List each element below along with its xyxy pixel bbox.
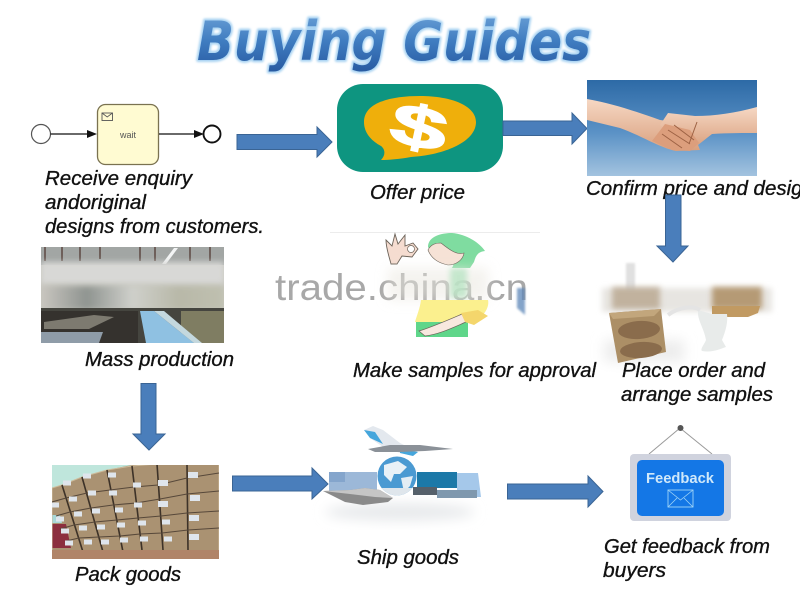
text: receive enquiry step: andoriginal (45, 192, 147, 214)
text: receive enquiry step (45, 168, 264, 238)
icon: hanging feedback sign: Feedback (646, 471, 715, 487)
label: get feedback from buyers (603, 536, 770, 582)
label: place order and arrange samples: arrange samples (621, 384, 773, 406)
icon: price speech bubble (337, 84, 503, 172)
arrow: confirm down to place order (657, 195, 688, 262)
text: receive enquiry step: Receive enquiry (45, 168, 193, 190)
label: pack goods: Pack goods (75, 564, 181, 586)
arrow: enquiry to offer price (237, 127, 332, 157)
label: ship goods: Ship goods (357, 547, 459, 569)
title: Buying Guides: Buying Guides (197, 10, 591, 73)
image: stacked cartons (51, 464, 219, 559)
label: make samples for approval: Make samples for approval (353, 360, 597, 382)
arrow: packing to shipping (232, 468, 328, 499)
illustration: woman making OK sign (330, 232, 540, 337)
text: receive enquiry step: designs from customers. (45, 216, 264, 238)
label: place order and arrange samples (621, 360, 773, 406)
image: worker carrying sample cartons (602, 263, 772, 363)
icon: BPMN process diagram (32, 104, 220, 164)
image: factory floor (41, 247, 224, 343)
illustration: plane, ship, globe and truck (323, 426, 481, 521)
arrow: shipping to feedback (508, 476, 603, 507)
icon: hanging feedback sign (630, 425, 731, 521)
icon: price speech bubble: $ (385, 89, 453, 165)
label: offer price: Offer price (370, 182, 465, 204)
arrow: offer price to confirm (503, 113, 587, 144)
arrow: faded fragment to samples (517, 288, 525, 315)
label: get feedback from buyers: Get feedback from (604, 536, 770, 558)
label: get feedback from buyers: buyers (603, 560, 666, 582)
image: handshake over blue sky (587, 80, 757, 176)
title: Buying Guides: Buying Guides (197, 10, 591, 73)
label: mass production: Mass production (85, 349, 234, 371)
label: place order and arrange samples: Place order and (622, 360, 766, 382)
icon: BPMN process diagram: wait (119, 130, 136, 140)
arrow: production down to packing (133, 384, 165, 450)
watermark: trade.china.cn: trade.china.cn (275, 267, 528, 308)
